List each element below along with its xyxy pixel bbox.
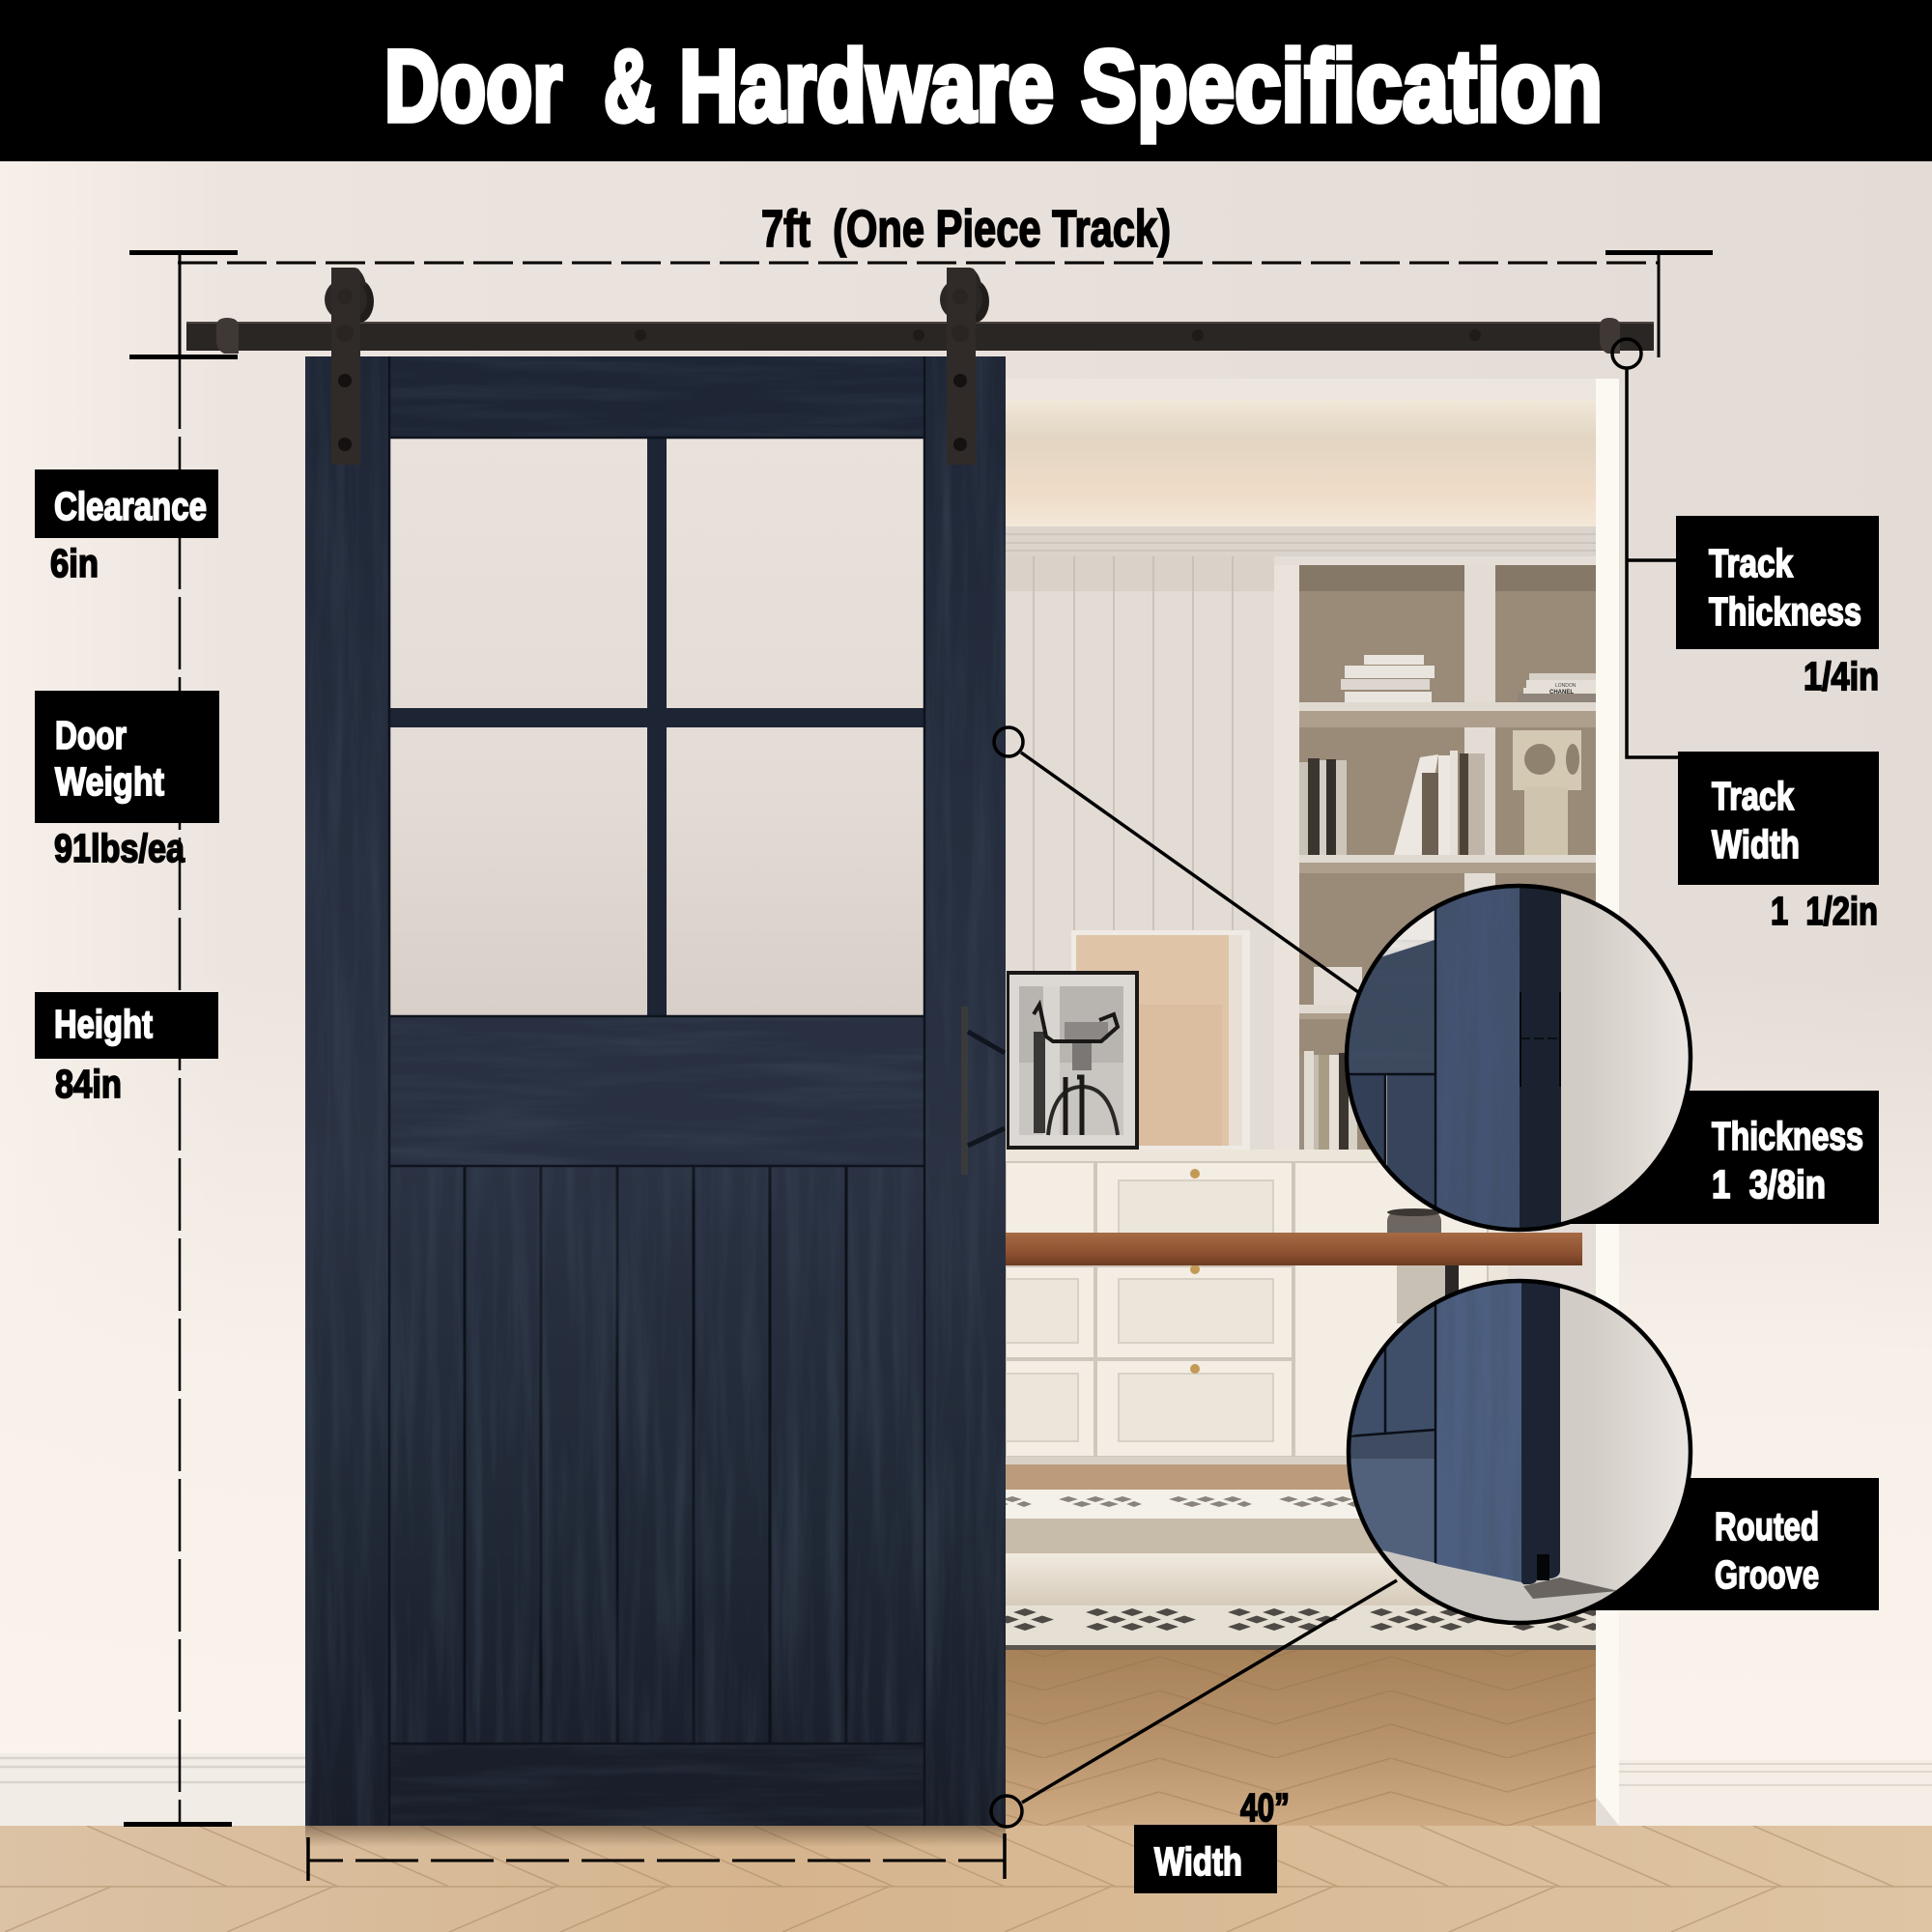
sliding track bbox=[186, 318, 1654, 354]
right book stack: CHANEL bbox=[1549, 690, 1574, 696]
routed groove leader line bbox=[991, 1580, 1397, 1827]
rug bbox=[1006, 1490, 1596, 1650]
clearance label bbox=[35, 469, 218, 585]
sculpture bbox=[1513, 730, 1581, 855]
door shadow on floor bbox=[305, 1826, 1006, 1847]
magnifier: door thickness detail bbox=[1345, 883, 1694, 1239]
stile face detail bbox=[1435, 1279, 1521, 1584]
floor detail bbox=[1435, 1563, 1617, 1617]
lock rail detail bbox=[1345, 940, 1435, 1073]
back floor bbox=[1006, 1464, 1596, 1491]
room seen through the doorway bbox=[1006, 379, 1619, 1826]
door weight label: Door bbox=[55, 713, 127, 757]
door pull handle bbox=[961, 1007, 1005, 1175]
panelled wall bbox=[1006, 556, 1276, 1175]
height label: Height bbox=[54, 1002, 153, 1046]
title: Door bbox=[384, 30, 562, 143]
right stop bbox=[1600, 318, 1620, 354]
thickness label bbox=[1546, 1091, 1879, 1224]
title banner bbox=[0, 0, 1932, 161]
clearance label: 6in bbox=[50, 541, 99, 585]
track bolts bbox=[635, 329, 1481, 341]
upright books bbox=[1299, 751, 1485, 855]
vertical planks bbox=[389, 1166, 924, 1744]
cabinets bbox=[1006, 1150, 1508, 1464]
right door jamb reveal bbox=[1596, 379, 1619, 1826]
track length label: 7ft (One Piece Track) bbox=[761, 200, 1171, 258]
track width label: 1 1/2in bbox=[1771, 889, 1878, 933]
right book stack: LONDON bbox=[1555, 683, 1577, 689]
door weight label: 91lbs/ea bbox=[54, 826, 185, 870]
shelves bbox=[1299, 702, 1596, 1019]
width label bbox=[1134, 1785, 1290, 1893]
routed groove label: Groove bbox=[1715, 1552, 1819, 1597]
height dimension line bbox=[124, 356, 232, 1827]
glass panes bbox=[389, 438, 924, 1016]
stile face detail bbox=[1436, 883, 1520, 1233]
opening header trim bbox=[1006, 379, 1619, 400]
tan art frame bbox=[1071, 930, 1250, 1151]
track width label: Width bbox=[1712, 822, 1800, 867]
planks detail bbox=[1351, 1306, 1435, 1435]
width label: Width bbox=[1154, 1839, 1242, 1884]
lower rail detail bbox=[1350, 1459, 1435, 1563]
right book stack bbox=[1518, 673, 1596, 702]
track thickness label: Thickness bbox=[1709, 589, 1861, 634]
left stop bbox=[216, 318, 239, 354]
wood grain overlays bbox=[305, 356, 1006, 1826]
book stack bbox=[1341, 655, 1435, 702]
ceiling glow bbox=[1006, 400, 1596, 526]
barn door bbox=[305, 356, 1006, 1826]
track callout leader bbox=[1612, 339, 1678, 757]
stile edge detail bbox=[1520, 883, 1561, 1233]
clearance label: Clearance bbox=[54, 484, 207, 528]
track thickness label: 1/4in bbox=[1804, 654, 1879, 698]
height label bbox=[35, 992, 218, 1106]
track length dimension bbox=[129, 250, 1713, 359]
track width label: Track bbox=[1712, 774, 1794, 818]
title: & bbox=[604, 30, 655, 143]
coffee mug bbox=[1387, 1208, 1441, 1241]
lock rail bbox=[389, 1016, 924, 1166]
thickness label: 1 3/8in bbox=[1712, 1162, 1826, 1207]
left hanger bbox=[325, 268, 374, 465]
baseboards bbox=[0, 1753, 1932, 1826]
floor shadow bbox=[1523, 1577, 1618, 1599]
track thickness label bbox=[1676, 516, 1879, 698]
crown moulding bbox=[1006, 526, 1596, 556]
door weight label: Weight bbox=[55, 759, 164, 804]
bottom rail bbox=[389, 1744, 924, 1826]
top rail bbox=[389, 356, 924, 438]
parquet floor bbox=[1006, 1650, 1596, 1826]
routed groove label bbox=[1546, 1478, 1879, 1610]
title: Hardware bbox=[679, 30, 1054, 143]
track thickness label: Track bbox=[1709, 541, 1793, 585]
title: Specification bbox=[1081, 30, 1603, 143]
track width label bbox=[1678, 752, 1879, 933]
width dimension line bbox=[308, 1833, 1005, 1881]
routed groove label: Routed bbox=[1715, 1504, 1819, 1548]
lower books bbox=[1299, 967, 1362, 1150]
door weight label bbox=[35, 691, 219, 870]
framed bicycle photograph bbox=[1007, 971, 1139, 1150]
bookcase bbox=[1274, 556, 1596, 1175]
front floor bbox=[0, 1826, 1932, 1932]
thickness leader line bbox=[994, 727, 1358, 992]
stile edge detail bbox=[1521, 1279, 1560, 1584]
width label: 40” bbox=[1240, 1785, 1290, 1830]
title bbox=[384, 30, 1603, 143]
magnifier: routed groove detail bbox=[1347, 1279, 1696, 1633]
thickness label: Thickness bbox=[1712, 1114, 1863, 1158]
height label: 84in bbox=[55, 1062, 122, 1106]
wood table bbox=[1006, 1233, 1582, 1304]
right hanger bbox=[940, 268, 989, 465]
plank detail bbox=[1350, 1075, 1384, 1161]
